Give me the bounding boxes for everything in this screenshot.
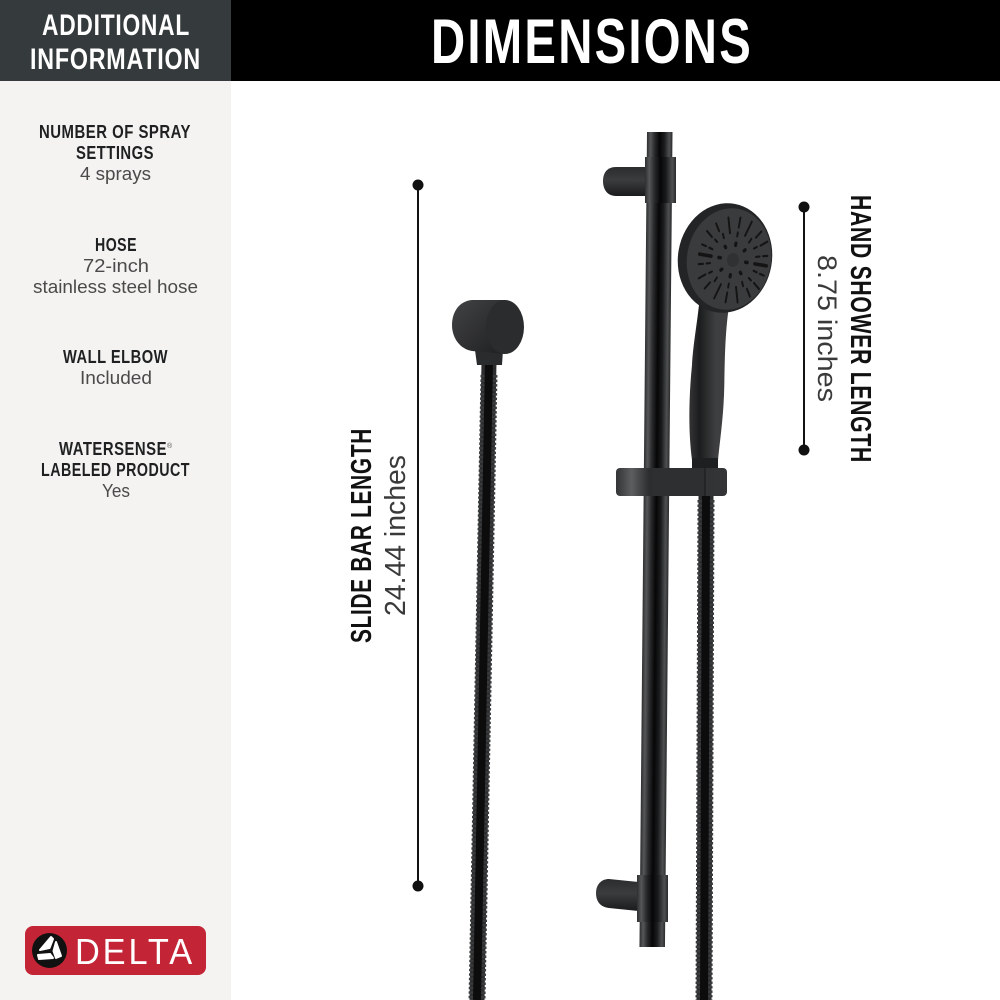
elbow cylinder <box>452 300 505 354</box>
label: hand shower length: 8.75 inches <box>812 255 842 402</box>
upper bracket <box>645 157 676 203</box>
label: hand shower length <box>812 195 876 463</box>
delta logo: DELTA <box>75 931 195 972</box>
lower wall stub <box>596 879 639 911</box>
sidebar panel background <box>0 81 231 1000</box>
info block: watersense labeled product: WATERSENSE <box>59 439 167 459</box>
info block: number of spray settings: 4 sprays <box>80 164 151 184</box>
info block: watersense labeled product: ® <box>167 442 173 450</box>
info block: wall elbow <box>63 347 168 388</box>
delta logo <box>25 926 206 975</box>
info block: number of spray settings: SETTINGS <box>76 143 154 163</box>
info block: number of spray settings: NUMBER OF SPRAY <box>39 122 191 142</box>
elbow face <box>486 300 524 354</box>
info block: watersense labeled product <box>41 439 190 501</box>
info block: hose <box>33 235 198 297</box>
sidebar heading: additional information: INFORMATION <box>30 43 201 76</box>
label: slide bar length: 24.44 inches <box>380 455 412 616</box>
handle <box>689 296 730 460</box>
lower bracket <box>637 875 668 922</box>
head face <box>679 201 779 317</box>
slide bar assembly <box>596 132 676 947</box>
slide clamp <box>616 468 727 496</box>
info block: hose: 72-inch <box>83 256 149 276</box>
elbow nut <box>475 350 503 365</box>
spray nozzles <box>692 212 774 308</box>
label: hand shower length: HAND SHOWER LENGTH <box>844 195 876 463</box>
sidebar heading: additional information: ADDITIONAL <box>42 9 190 42</box>
shower hose <box>704 496 706 1000</box>
info block: hose: stainless steel hose <box>33 277 198 297</box>
label: slide bar length: SLIDE BAR LENGTH <box>346 428 378 643</box>
info block: wall elbow: WALL ELBOW <box>63 347 168 367</box>
upper wall stub <box>603 167 646 196</box>
info block: wall elbow: Included <box>80 368 152 388</box>
head rim <box>669 196 781 320</box>
hose from wall elbow <box>477 362 489 1000</box>
sidebar heading: additional information <box>0 0 231 81</box>
slide bar <box>639 132 672 947</box>
dimension line: hand shower length <box>798 202 810 456</box>
title banner: dimensions <box>231 0 1000 81</box>
info block: hose: HOSE <box>95 235 137 255</box>
title banner: dimensions: DIMENSIONS <box>431 7 753 77</box>
info block: number of spray settings <box>39 122 191 184</box>
hand shower <box>616 196 781 1000</box>
handle collar <box>692 458 718 468</box>
dimension line: slide bar length <box>412 180 424 892</box>
wall elbow and hose <box>452 300 524 1000</box>
info block: watersense labeled product: Yes <box>102 481 130 501</box>
info block: watersense labeled product: LABELED PRODUCT <box>41 460 190 480</box>
label: slide bar length <box>346 428 412 643</box>
